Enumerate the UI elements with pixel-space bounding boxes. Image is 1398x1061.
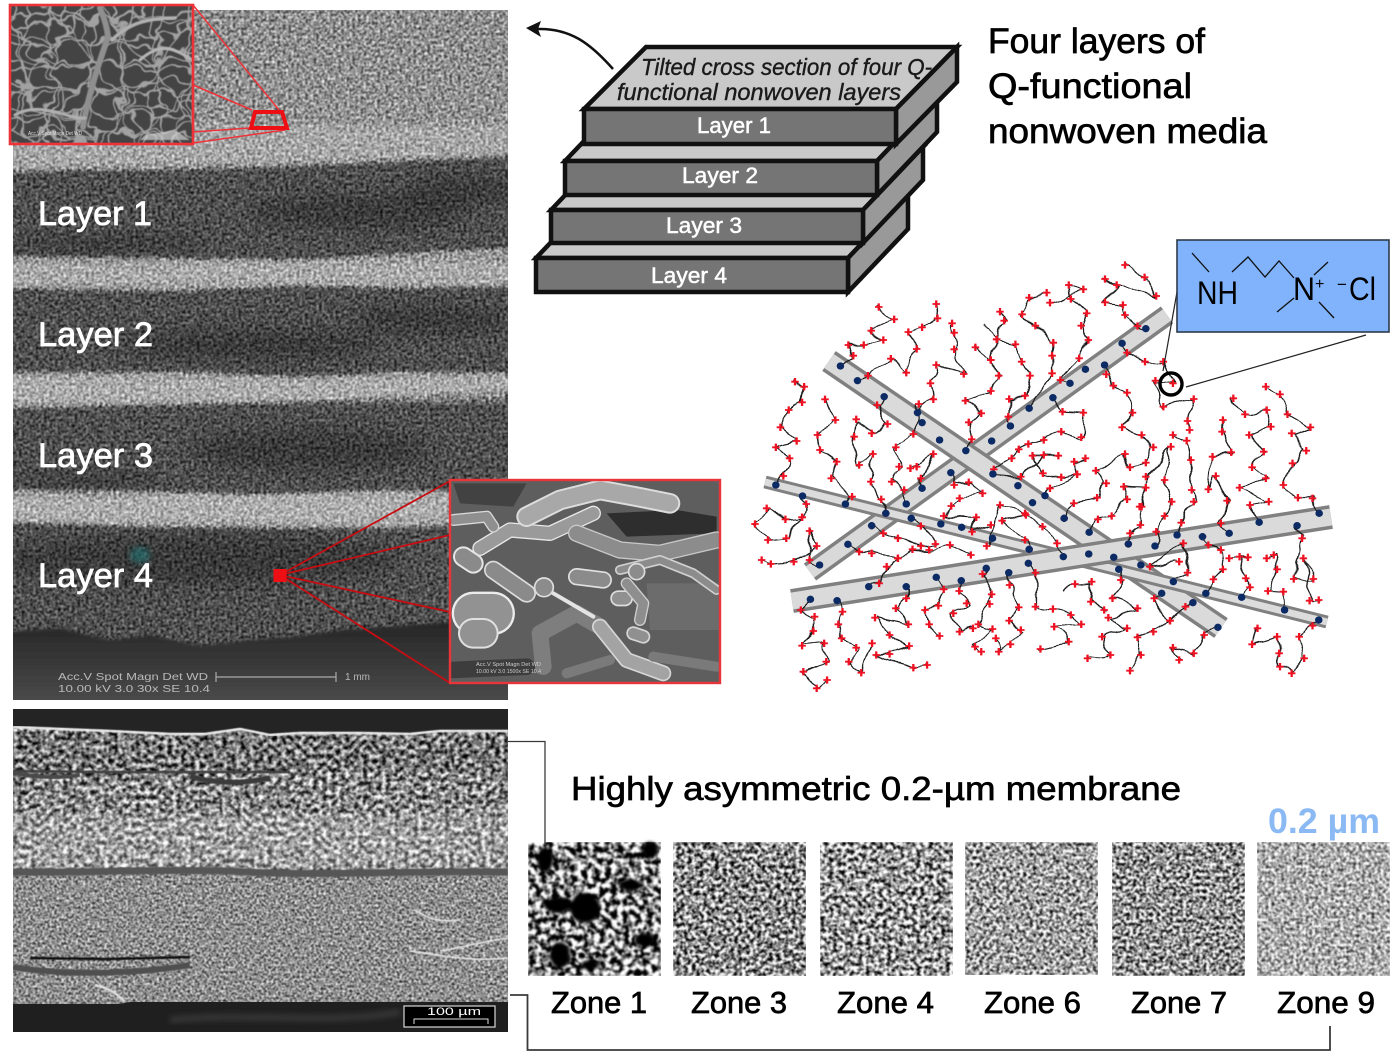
membrane seams — [13, 771, 508, 1002]
zone labels: Zone 1 — [551, 985, 647, 1020]
zone labels — [551, 985, 1375, 1020]
zoom inset: nanofiber surface — [11, 6, 192, 143]
fiber 1 — [829, 361, 1221, 628]
heading: four layers: Q-functional — [988, 67, 1192, 106]
callout: chemical structure: Cl — [1349, 271, 1376, 307]
zone labels: Zone 9 — [1277, 985, 1375, 1020]
zone micrographs — [528, 842, 1390, 976]
zoom inset: fiber close-up — [450, 480, 720, 683]
scale bar 100 µm — [404, 1006, 495, 1027]
teal specimen speck — [130, 547, 150, 563]
layer 4 slab: Layer 4 — [651, 263, 727, 288]
panel: SEM cross section of four nonwoven layers — [0, 10, 520, 705]
callout: chemical structure — [1160, 240, 1389, 395]
zone 6 — [965, 842, 1098, 975]
layer 1 slab — [584, 47, 957, 144]
bracket connectors — [508, 742, 1330, 1050]
layer 2 slab: Layer 2 — [682, 163, 758, 188]
zone 7 — [1112, 842, 1245, 976]
fiber 4 — [792, 517, 1331, 601]
zone 1 — [528, 842, 661, 976]
callout: chemical structure: + — [1315, 276, 1324, 293]
zone labels: Zone 7 — [1131, 985, 1227, 1020]
layer 4 slab — [536, 195, 908, 292]
instrument data text: 10.00 kV 3.0 30x SE 10.4 — [58, 684, 211, 695]
instrument data text — [58, 672, 370, 692]
heading: membrane: Highly asymmetric 0.2-µm membrane — [571, 770, 1181, 807]
layer 3 slab — [551, 147, 923, 243]
fiber 3 — [765, 482, 1327, 622]
zone labels: Zone 3 — [691, 985, 787, 1020]
zone 9 — [1257, 842, 1390, 976]
scale bar 100 µm: 100 µm — [427, 1006, 481, 1018]
layer labels on SEM image: Layer 1 — [38, 195, 152, 233]
instrument data text: Acc.V Spot Magn Det WD — [58, 672, 208, 683]
zoom lines and frame: lower inset — [274, 480, 720, 683]
layer labels on SEM image: Layer 4 — [38, 557, 153, 595]
callout: chemical structure: − — [1337, 275, 1347, 294]
stack caption — [617, 54, 932, 105]
callout: chemical structure: NH — [1197, 275, 1238, 311]
label: 0.2 µm: 0.2 µm — [1268, 802, 1380, 841]
zone labels: Zone 4 — [837, 985, 934, 1020]
top surface edge — [13, 727, 508, 735]
diagram: layered stack — [536, 47, 957, 292]
zone labels: Zone 6 — [984, 985, 1081, 1020]
stack caption: Tilted cross section of four Q- — [641, 54, 932, 80]
zone 3 — [673, 842, 806, 976]
diagram: fibers with polymer chains — [755, 265, 1331, 688]
panel: asymmetric membrane cross section — [5, 709, 520, 1032]
heading: four layers — [988, 22, 1268, 151]
layer labels on SEM image: Layer 2 — [38, 316, 153, 354]
zone 4 — [820, 842, 953, 976]
layer 2 slab — [565, 98, 937, 195]
inset instrument text: 10.00 kV 3.0 1500x SE 10.4 — [476, 669, 541, 675]
heading: four layers: nonwoven media — [988, 112, 1268, 151]
anchor dots — [772, 325, 1323, 631]
stack caption: functional nonwoven layers — [617, 79, 902, 105]
callout: chemical structure: N — [1293, 271, 1315, 307]
heading: four layers: Four layers of — [988, 22, 1205, 61]
layer labels on SEM image — [38, 195, 153, 595]
inset scale text: Acc.V Spot Magn Det WD — [28, 131, 82, 137]
fiber 2 — [810, 315, 1167, 572]
layer 3 slab: Layer 3 — [666, 213, 742, 238]
polymer chains and charges — [755, 265, 1323, 688]
layer labels on SEM image: Layer 3 — [38, 437, 153, 475]
inset instrument text — [476, 662, 541, 673]
zoom lines and frame: top inset — [10, 5, 287, 144]
arrow from stack to SEM image — [526, 21, 613, 69]
instrument data text: 1 mm — [345, 672, 370, 683]
inset instrument text: Acc.V Spot Magn Det WD — [476, 662, 541, 668]
layer 1 slab: Layer 1 — [697, 113, 771, 138]
